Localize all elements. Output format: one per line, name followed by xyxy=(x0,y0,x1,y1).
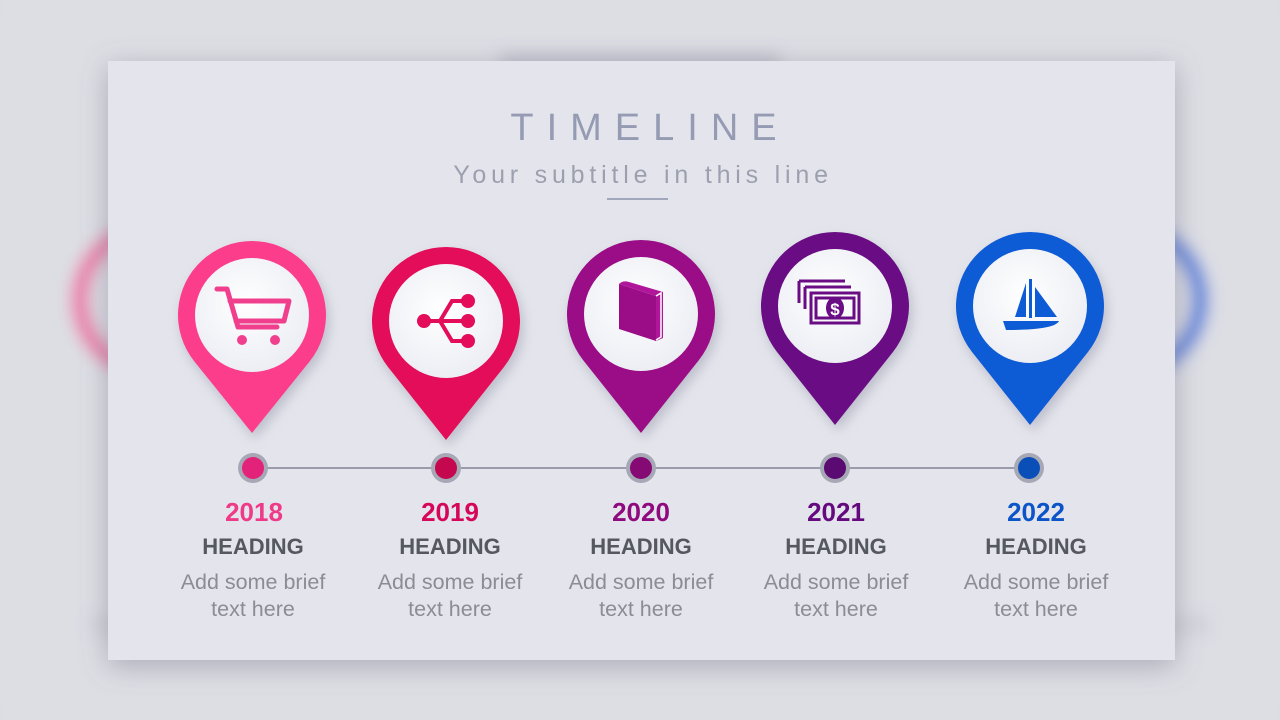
text 2020: HEADING xyxy=(590,534,692,559)
text 2018 xyxy=(181,497,325,621)
text 2022: HEADING xyxy=(985,534,1087,559)
icon: money xyxy=(799,281,859,323)
dots xyxy=(238,453,1044,483)
text 2019: text here xyxy=(408,597,492,621)
text 2018: HEADING xyxy=(202,534,304,559)
timeline line xyxy=(253,467,1029,469)
icon: sailboat xyxy=(1003,279,1059,330)
text 2018: 2018 xyxy=(225,497,283,527)
pin 2022 xyxy=(956,232,1104,425)
text 2021: text here xyxy=(794,597,878,621)
pin 2021 xyxy=(761,232,909,425)
text 2022: Add some brief xyxy=(964,570,1108,594)
text 2019: 2019 xyxy=(421,497,479,527)
title: TIMELINE xyxy=(510,107,790,149)
text 2018: text here xyxy=(211,597,295,621)
text 2021: 2021 xyxy=(807,497,865,527)
icon: book xyxy=(619,284,656,341)
pin 2019 xyxy=(372,247,520,440)
text 2021 xyxy=(764,497,908,621)
text 2022: text here xyxy=(994,597,1078,621)
pin 2020 xyxy=(567,240,715,433)
text 2019: Add some brief xyxy=(378,570,522,594)
icon: cart xyxy=(217,289,289,327)
text 2021: Add some brief xyxy=(764,570,908,594)
icon: share tree xyxy=(424,301,468,341)
text 2020: 2020 xyxy=(612,497,670,527)
text 2019: HEADING xyxy=(399,534,501,559)
text 2022 xyxy=(964,497,1108,621)
text 2019 xyxy=(378,497,522,621)
pin 2021: $ xyxy=(830,300,840,319)
text 2018: Add some brief xyxy=(181,570,325,594)
text 2020: text here xyxy=(599,597,683,621)
text 2020 xyxy=(569,497,713,621)
text 2020: Add some brief xyxy=(569,570,713,594)
subtitle: Your subtitle in this line xyxy=(453,161,833,189)
panel xyxy=(108,61,1175,660)
pin 2018 xyxy=(178,241,326,433)
text 2021: HEADING xyxy=(785,534,887,559)
text 2022: 2022 xyxy=(1007,497,1065,527)
